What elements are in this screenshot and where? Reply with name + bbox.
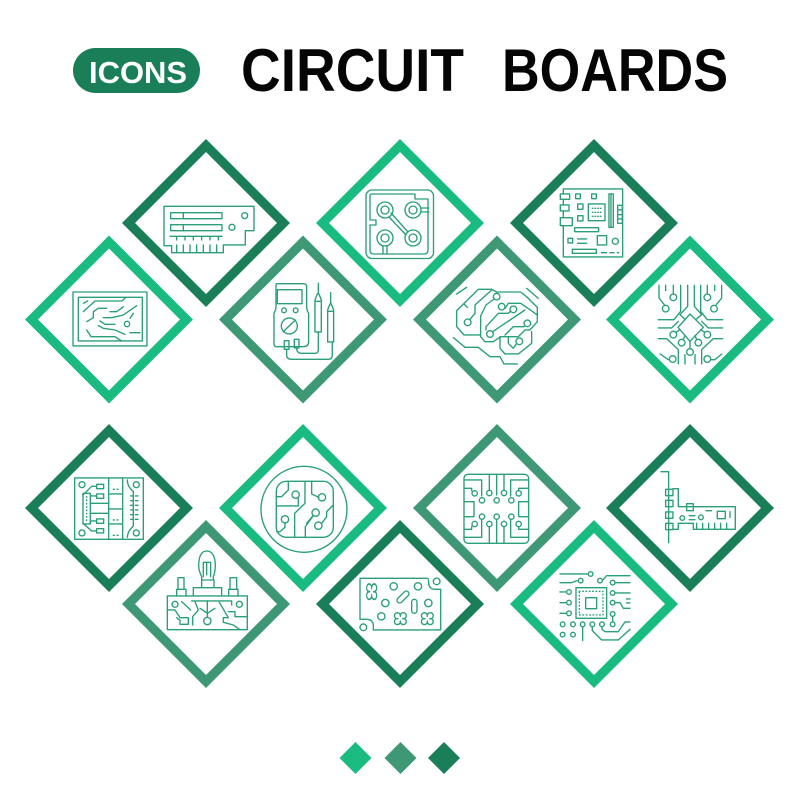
diamond frame: components board	[322, 526, 478, 682]
diamond frame: expansion card	[128, 146, 284, 300]
diamond frame: microchip traces	[612, 242, 768, 397]
icon: sound card	[661, 472, 735, 543]
badge: ICONS	[73, 48, 200, 93]
diamond frame: prototype board	[32, 430, 186, 586]
diamond frame: chip board	[420, 430, 574, 586]
pagination diamonds	[340, 742, 460, 774]
icon: pcb traces	[73, 292, 147, 346]
diamond frame: pcb	[32, 242, 186, 397]
icon: prototype board	[75, 478, 143, 539]
diamond frame: brain	[420, 242, 574, 397]
icon: microchip traces	[658, 285, 723, 364]
diamond frame: lamp board	[128, 526, 284, 682]
diamond frame: socket board	[322, 146, 478, 300]
icon: socket board	[366, 190, 434, 258]
icon: circuit brain	[453, 287, 538, 364]
icon: multimeter	[274, 283, 334, 359]
title: BOARDS	[502, 37, 728, 104]
icon: expansion card	[164, 206, 254, 253]
icon: round circuit	[261, 466, 347, 552]
diamond frame: motherboard	[516, 146, 672, 300]
title: CIRCUIT	[241, 37, 464, 104]
title	[241, 37, 728, 104]
diamond frame: processor traces	[516, 526, 672, 682]
diamond frame: multimeter	[226, 242, 380, 397]
badge: ICONS: ICONS	[89, 55, 187, 90]
diamond frame: sound card	[612, 430, 768, 586]
icon: chip board	[464, 474, 529, 543]
icon: components board	[360, 578, 441, 631]
icon: motherboard	[560, 189, 623, 257]
diamond frame: round circuit	[226, 430, 380, 586]
icon: lamp on board	[167, 551, 247, 630]
icon: processor traces	[560, 572, 630, 641]
